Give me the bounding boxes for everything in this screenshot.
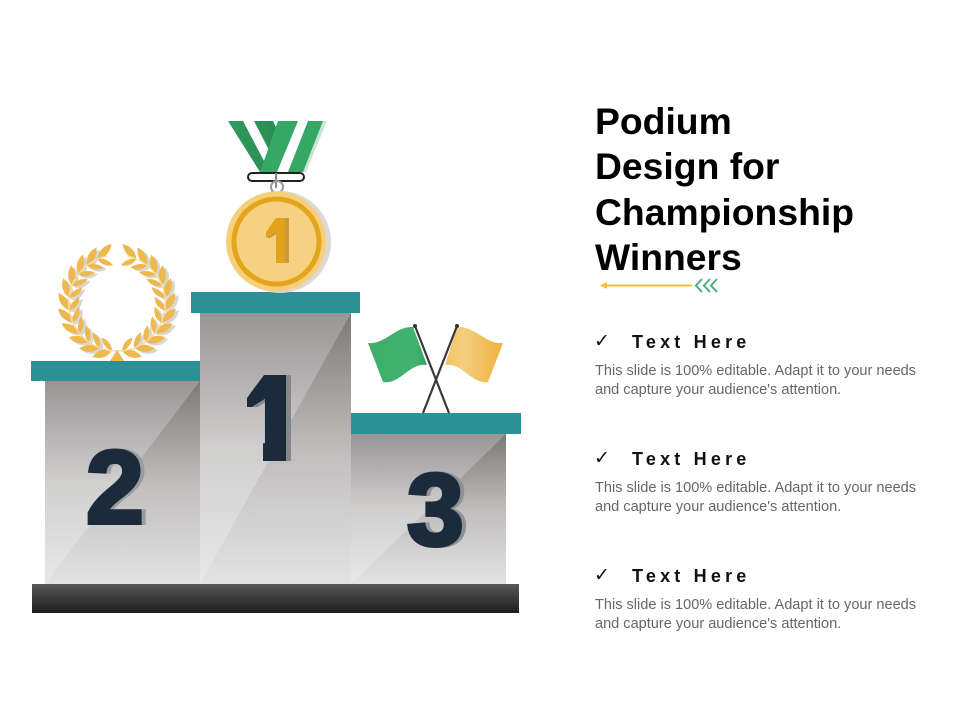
item 1: This slide is 100% editable. Adapt it to your needs bbox=[595, 363, 916, 379]
item 3 bbox=[594, 564, 916, 632]
icon: medal: 1 bbox=[267, 205, 303, 277]
column 3: 3 bbox=[407, 453, 464, 567]
item 2: Text Here bbox=[632, 449, 751, 469]
title bbox=[595, 100, 854, 278]
item 2: ✓ bbox=[594, 447, 610, 469]
clasp bbox=[248, 173, 304, 181]
title: Design for bbox=[595, 145, 779, 187]
column 2 bbox=[45, 381, 200, 584]
icon: laurel wreath bbox=[58, 244, 179, 361]
title: Winners bbox=[595, 236, 742, 278]
ribbon bbox=[228, 121, 327, 172]
item 1 bbox=[594, 330, 916, 398]
item 2: This slide is 100% editable. Adapt it to your needs bbox=[595, 480, 916, 496]
item 3: Text Here bbox=[632, 566, 751, 586]
column 1 bbox=[200, 313, 351, 584]
cap left bbox=[31, 361, 200, 381]
column 3 bbox=[351, 434, 506, 584]
cap right bbox=[351, 413, 521, 434]
item 1: Text Here bbox=[632, 332, 751, 352]
decorative arrow bbox=[600, 279, 717, 292]
title: Championship bbox=[595, 191, 854, 233]
item 1: and capture your audience's attention. bbox=[595, 382, 841, 398]
column 2: 2 bbox=[86, 430, 144, 546]
item 1: ✓ bbox=[594, 330, 610, 352]
item 2: and capture your audience's attention. bbox=[595, 498, 841, 514]
podium illustration bbox=[31, 121, 718, 613]
icon: crossed flags bbox=[368, 324, 503, 413]
title: Podium bbox=[595, 100, 732, 142]
icon: medal: 1 bbox=[264, 205, 300, 277]
cap centre bbox=[191, 292, 360, 313]
column 1: 1 bbox=[245, 350, 314, 488]
item 3: ✓ bbox=[594, 564, 610, 586]
column 2: 2 bbox=[90, 430, 148, 546]
item 3: This slide is 100% editable. Adapt it to your needs bbox=[595, 597, 916, 613]
item 3: and capture your audience's attention. bbox=[595, 616, 841, 632]
item 2 bbox=[594, 447, 916, 514]
column 1: 1 bbox=[241, 350, 310, 488]
icon: medal bbox=[226, 121, 331, 293]
base bbox=[32, 584, 519, 613]
column 3: 3 bbox=[411, 453, 468, 567]
